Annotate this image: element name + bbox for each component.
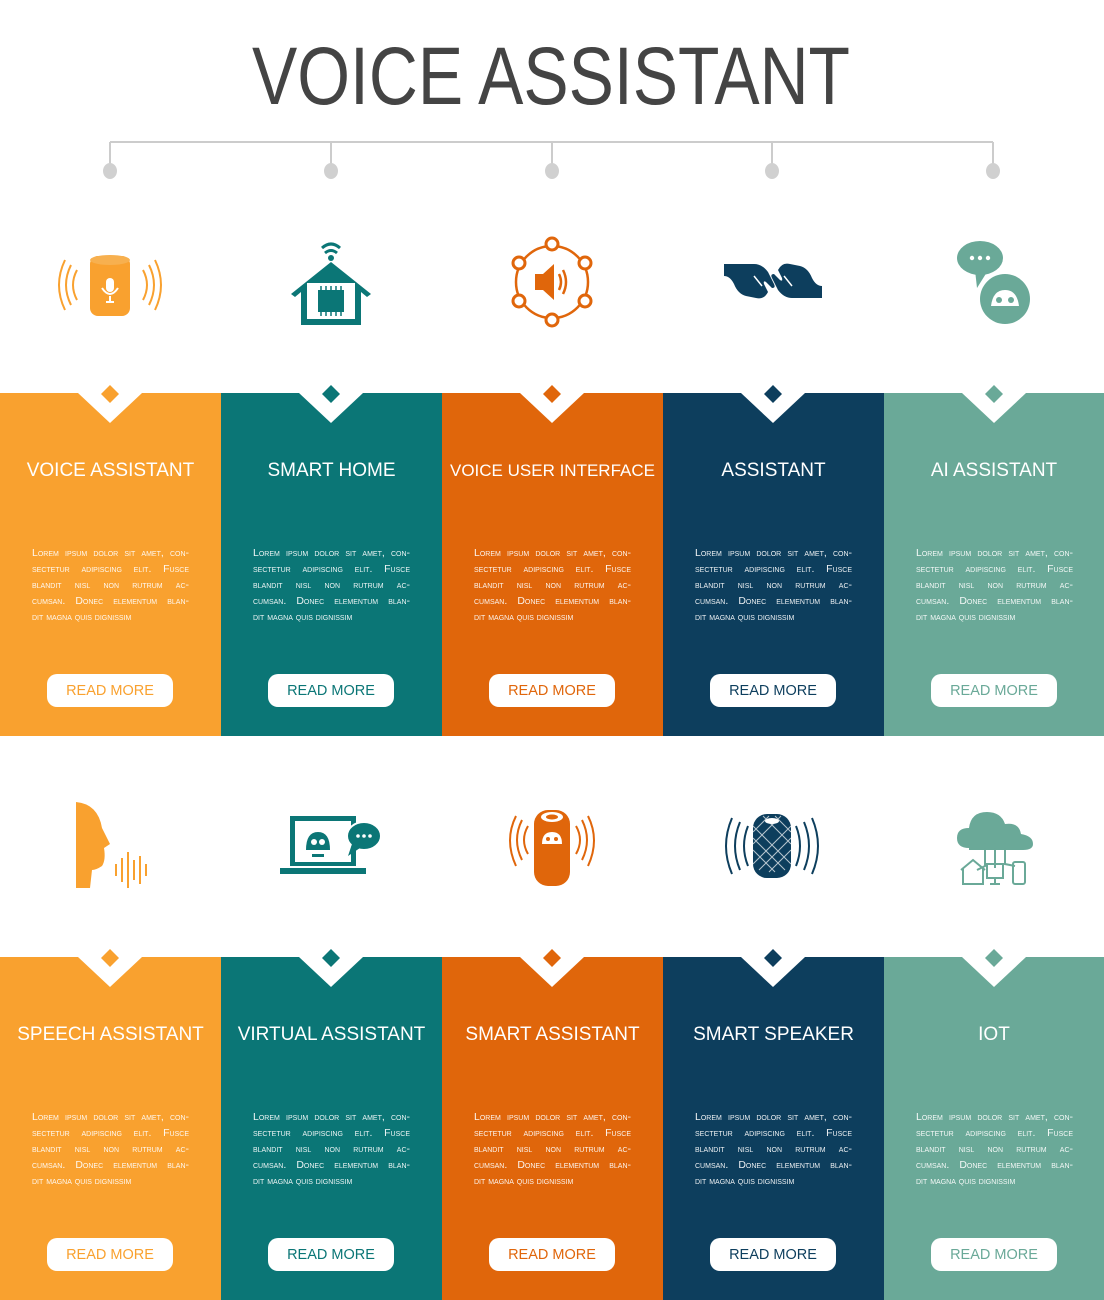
panel: speech assistant [0, 957, 221, 1300]
body text [695, 547, 852, 623]
body text: dit magna quis dignissim [32, 1175, 131, 1187]
body text [474, 1111, 631, 1187]
body text: blandit nisl non rutrum ac- [916, 579, 1073, 591]
body text [695, 1111, 852, 1187]
panel: iot [884, 957, 1104, 1300]
panel: smart speaker [663, 957, 884, 1300]
body text [32, 1111, 189, 1187]
button [489, 1238, 615, 1271]
panel: smart assistant [442, 957, 663, 1300]
heading: SPEECH ASSISTANT [17, 1024, 204, 1045]
button [931, 1238, 1057, 1271]
body text [474, 547, 631, 623]
body text: Lorem ipsum dolor sit amet, con- [916, 547, 1073, 559]
button: READ MORE [729, 683, 817, 699]
icon: voice user interface [512, 236, 592, 328]
body text [253, 1111, 410, 1187]
button [47, 674, 173, 707]
body text: dit magna quis dignissim [695, 611, 794, 623]
body text: blandit nisl non rutrum ac- [474, 579, 631, 591]
icon: smart speaker with mic [58, 255, 162, 316]
heading: SMART ASSISTANT [465, 1024, 640, 1045]
body text: cumsan. Donec elementum blan- [695, 1159, 852, 1171]
body text: cumsan. Donec elementum blan- [253, 595, 410, 607]
heading: AI ASSISTANT [931, 460, 1057, 481]
body text: blandit nisl non rutrum ac- [253, 1143, 410, 1155]
body text: blandit nisl non rutrum ac- [32, 579, 189, 591]
panel: smart home [221, 393, 442, 736]
body text [916, 547, 1073, 623]
body text: dit magna quis dignissim [474, 1175, 573, 1187]
heading: VOICE USER INTERFACE [450, 461, 655, 480]
body text: sectetur adipiscing elit. Fusce [474, 563, 631, 575]
body text [253, 547, 410, 623]
body text: Lorem ipsum dolor sit amet, con- [916, 1111, 1073, 1123]
body text: sectetur adipiscing elit. Fusce [474, 1127, 631, 1139]
button [489, 674, 615, 707]
body text: blandit nisl non rutrum ac- [695, 1143, 852, 1155]
body text: cumsan. Donec elementum blan- [474, 595, 631, 607]
body text: sectetur adipiscing elit. Fusce [916, 563, 1073, 575]
heading: SMART HOME [267, 460, 396, 481]
body text: Lorem ipsum dolor sit amet, con- [253, 547, 410, 559]
icon: smart assistant speaker [509, 810, 595, 886]
icon: assistant hands [724, 264, 822, 298]
body text: Lorem ipsum dolor sit amet, con- [32, 547, 189, 559]
body text: sectetur adipiscing elit. Fusce [253, 1127, 410, 1139]
body text: blandit nisl non rutrum ac- [474, 1143, 631, 1155]
body text: Lorem ipsum dolor sit amet, con- [695, 1111, 852, 1123]
button: READ MORE [950, 683, 1038, 699]
body text: blandit nisl non rutrum ac- [695, 579, 852, 591]
panel: ai assistant [884, 393, 1104, 736]
icon: smart home [291, 242, 371, 325]
body text [32, 547, 189, 623]
panel: assistant [663, 393, 884, 736]
button: READ MORE [508, 683, 596, 699]
body text: blandit nisl non rutrum ac- [253, 579, 410, 591]
icon: ai assistant chat [957, 241, 1030, 324]
body text: Lorem ipsum dolor sit amet, con- [695, 547, 852, 559]
icon: speech head [76, 802, 147, 888]
body text: dit magna quis dignissim [253, 611, 352, 623]
body text: dit magna quis dignissim [916, 1175, 1015, 1187]
button: READ MORE [66, 683, 154, 699]
heading: VOICE ASSISTANT [27, 460, 194, 481]
body text: dit magna quis dignissim [916, 611, 1015, 623]
body text: Lorem ipsum dolor sit amet, con- [474, 1111, 631, 1123]
body text: dit magna quis dignissim [32, 611, 131, 623]
panel: voice assistant [0, 393, 221, 736]
body text: cumsan. Donec elementum blan- [474, 1159, 631, 1171]
panel: virtual assistant [221, 957, 442, 1300]
body text: sectetur adipiscing elit. Fusce [253, 563, 410, 575]
icon: virtual assistant laptop [280, 816, 380, 874]
body text: sectetur adipiscing elit. Fusce [916, 1127, 1073, 1139]
heading: SMART SPEAKER [693, 1024, 854, 1045]
body text [916, 1111, 1073, 1187]
body text: sectetur adipiscing elit. Fusce [32, 1127, 189, 1139]
body text: cumsan. Donec elementum blan- [695, 595, 852, 607]
button [931, 674, 1057, 707]
icon: smart speaker mesh [725, 814, 819, 878]
body text: cumsan. Donec elementum blan- [32, 1159, 189, 1171]
body text: blandit nisl non rutrum ac- [32, 1143, 189, 1155]
body text: cumsan. Donec elementum blan- [916, 1159, 1073, 1171]
body text: sectetur adipiscing elit. Fusce [695, 1127, 852, 1139]
button: READ MORE [729, 1247, 817, 1263]
connector tree [103, 141, 1000, 179]
body text: dit magna quis dignissim [474, 611, 573, 623]
button [268, 674, 394, 707]
body text: cumsan. Donec elementum blan- [253, 1159, 410, 1171]
body text: sectetur adipiscing elit. Fusce [695, 563, 852, 575]
heading: IOT [978, 1024, 1010, 1045]
button: READ MORE [508, 1247, 596, 1263]
body text: cumsan. Donec elementum blan- [916, 595, 1073, 607]
icon: iot cloud [957, 812, 1033, 885]
button: READ MORE [287, 1247, 375, 1263]
button: READ MORE [950, 1247, 1038, 1263]
body text: blandit nisl non rutrum ac- [916, 1143, 1073, 1155]
button [268, 1238, 394, 1271]
heading: ASSISTANT [721, 460, 826, 481]
body text: Lorem ipsum dolor sit amet, con- [474, 547, 631, 559]
body text: dit magna quis dignissim [253, 1175, 352, 1187]
button: READ MORE [66, 1247, 154, 1263]
body text: cumsan. Donec elementum blan- [32, 595, 189, 607]
body text: sectetur adipiscing elit. Fusce [32, 563, 189, 575]
body text: Lorem ipsum dolor sit amet, con- [32, 1111, 189, 1123]
body text: dit magna quis dignissim [695, 1175, 794, 1187]
panel: voice user interface [442, 393, 663, 736]
body text: Lorem ipsum dolor sit amet, con- [253, 1111, 410, 1123]
button: READ MORE [287, 683, 375, 699]
button [47, 1238, 173, 1271]
button [710, 674, 836, 707]
heading: VIRTUAL ASSISTANT [238, 1024, 425, 1045]
button [710, 1238, 836, 1271]
